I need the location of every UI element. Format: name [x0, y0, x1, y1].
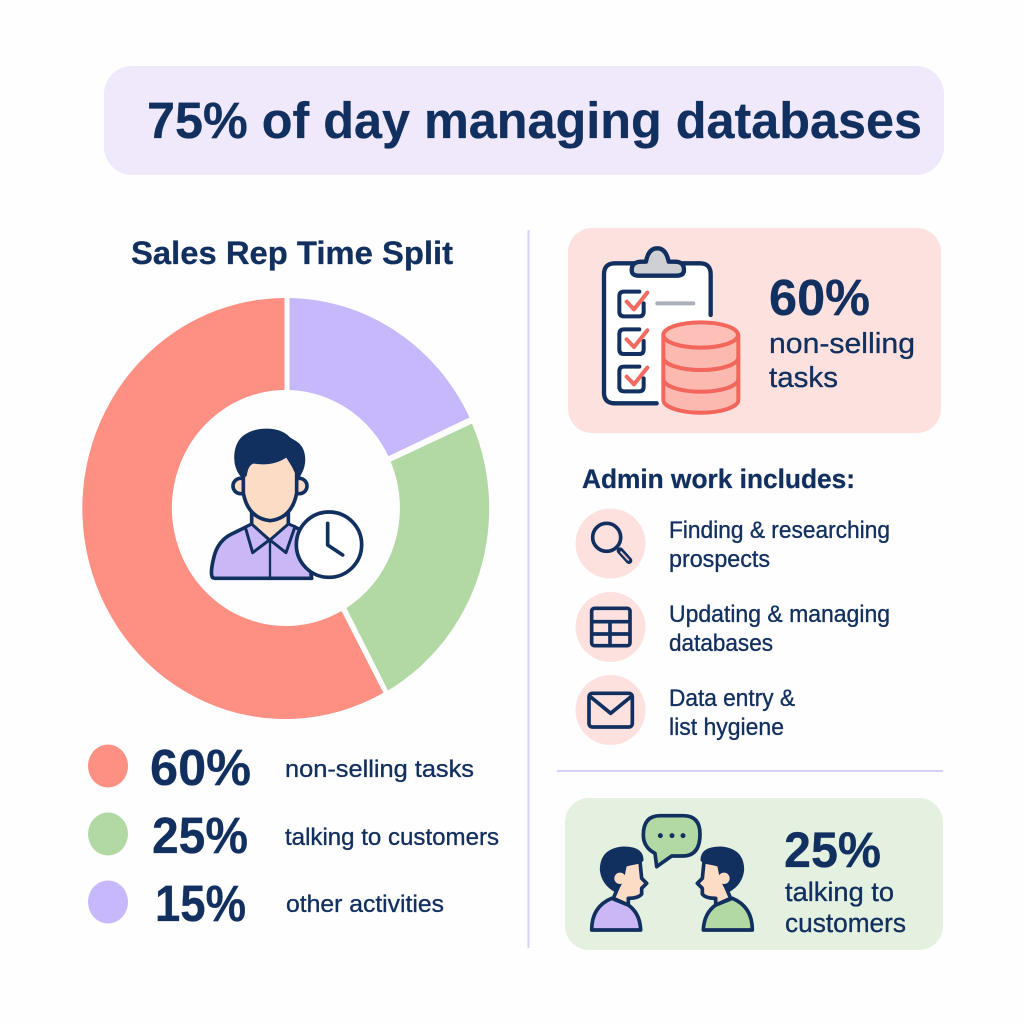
- heading: admin work: Admin work includes:: [582, 464, 855, 494]
- panel: non-selling tasks: [568, 228, 941, 433]
- segment: talking to customers 25%: [346, 424, 489, 690]
- item: finding prospects: prospects: [669, 546, 770, 573]
- item: updating databases: databases: [669, 630, 773, 657]
- chart heading: Sales Rep Time Split: [131, 235, 453, 271]
- legend row: 60%: [88, 739, 474, 796]
- legend: [88, 739, 499, 932]
- stat: 60% non-selling tasks: tasks: [769, 362, 838, 394]
- icon: clipboard and database: [604, 248, 738, 413]
- stat: 25% talking to customers: talking to: [785, 877, 894, 907]
- speech bubble: [643, 816, 700, 867]
- person left: [592, 848, 647, 930]
- legend row: 60%: 60%: [150, 739, 251, 796]
- legend row: 15%: 15%: [155, 875, 246, 932]
- item: data entry: [576, 675, 795, 745]
- legend row: 15%: other activities: [286, 891, 444, 918]
- title text: 75% of day managing databases: [147, 92, 922, 149]
- person right: [697, 848, 752, 930]
- panel: talking to customers: [565, 798, 943, 950]
- stat: 25% talking to customers: [784, 822, 906, 938]
- item: finding prospects: Finding & researching: [669, 517, 890, 544]
- item: updating databases: [576, 592, 890, 662]
- segment: non-selling tasks 60%: [82, 298, 383, 719]
- stat: 60% non-selling tasks: non-selling: [769, 328, 915, 360]
- icon: sales rep with clock: [211, 430, 362, 578]
- stat: 60% non-selling tasks: 60%: [769, 269, 870, 326]
- stat: 60% non-selling tasks: [769, 269, 915, 394]
- legend row: 60%: non-selling tasks: [285, 756, 474, 783]
- legend row: 25%: [88, 807, 499, 864]
- title banner: [104, 66, 944, 175]
- item: data entry: Data entry &: [669, 685, 795, 712]
- item: updating databases: Updating & managing: [669, 601, 890, 628]
- legend row: 15%: [88, 875, 444, 932]
- stat: 25% talking to customers: customers: [785, 908, 906, 938]
- legend row: 25%: talking to customers: [285, 824, 499, 851]
- stat: 25% talking to customers: 25%: [784, 822, 881, 878]
- legend row: 25%: 25%: [152, 807, 248, 864]
- donut chart: time split: [82, 298, 489, 719]
- admin work list: [576, 508, 890, 745]
- item: data entry: list hygiene: [669, 714, 784, 741]
- item: finding prospects: [576, 508, 890, 578]
- icon: two people conversing: [592, 816, 752, 930]
- segment: other activities 15%: [290, 298, 470, 456]
